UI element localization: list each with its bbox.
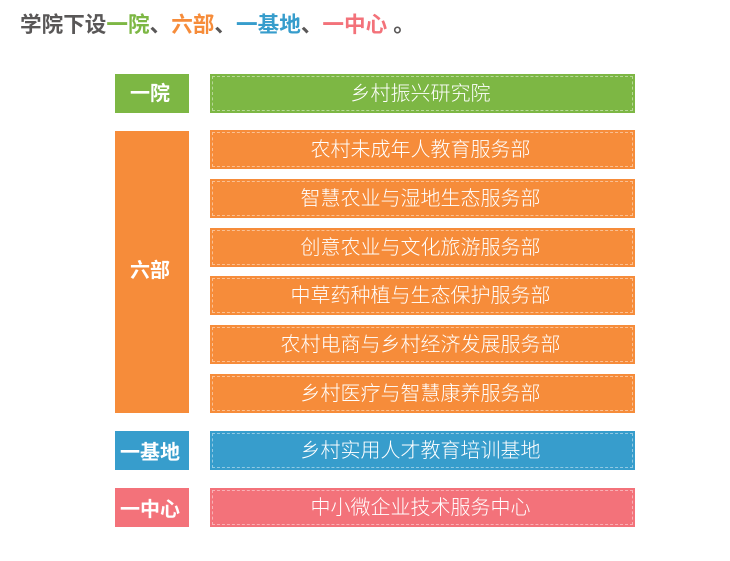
row: 乡村振兴研究院	[210, 74, 635, 113]
row: 中草药种植与生态保护服务部: 中草药种植与生态保护服务部	[290, 285, 550, 307]
label: 六部: 六部	[130, 260, 170, 282]
row: 智慧农业与湿地生态服务部	[210, 179, 635, 218]
row: 农村电商与乡村经济发展服务部: 农村电商与乡村经济发展服务部	[280, 334, 560, 356]
label: 一中心: 一中心	[120, 499, 180, 521]
row: 乡村实用人才教育培训基地: 乡村实用人才教育培训基地	[300, 440, 540, 462]
label: 一院: 一院	[130, 83, 170, 105]
row: 乡村振兴研究院: 乡村振兴研究院	[350, 83, 490, 105]
title: 学院下设一院、六部、一基地、一中心 。	[20, 12, 415, 37]
row: 乡村医疗与智慧康养服务部	[210, 374, 635, 413]
label: 一中心	[115, 488, 189, 527]
row: 农村未成年人教育服务部	[210, 130, 635, 169]
row: 创意农业与文化旅游服务部	[210, 228, 635, 267]
label: 一基地	[115, 431, 189, 470]
row: 乡村医疗与智慧康养服务部: 乡村医疗与智慧康养服务部	[300, 383, 540, 405]
row: 农村电商与乡村经济发展服务部	[210, 325, 635, 364]
row: 中小微企业技术服务中心	[210, 488, 635, 527]
row: 中草药种植与生态保护服务部	[210, 276, 635, 315]
row: 智慧农业与湿地生态服务部: 智慧农业与湿地生态服务部	[300, 188, 540, 210]
row: 农村未成年人教育服务部: 农村未成年人教育服务部	[310, 139, 530, 161]
label: 六部	[115, 131, 189, 413]
row: 创意农业与文化旅游服务部: 创意农业与文化旅游服务部	[300, 237, 540, 259]
row: 乡村实用人才教育培训基地	[210, 431, 635, 470]
label: 一基地: 一基地	[120, 442, 180, 464]
label: 一院	[115, 74, 189, 113]
row: 中小微企业技术服务中心: 中小微企业技术服务中心	[310, 497, 530, 519]
